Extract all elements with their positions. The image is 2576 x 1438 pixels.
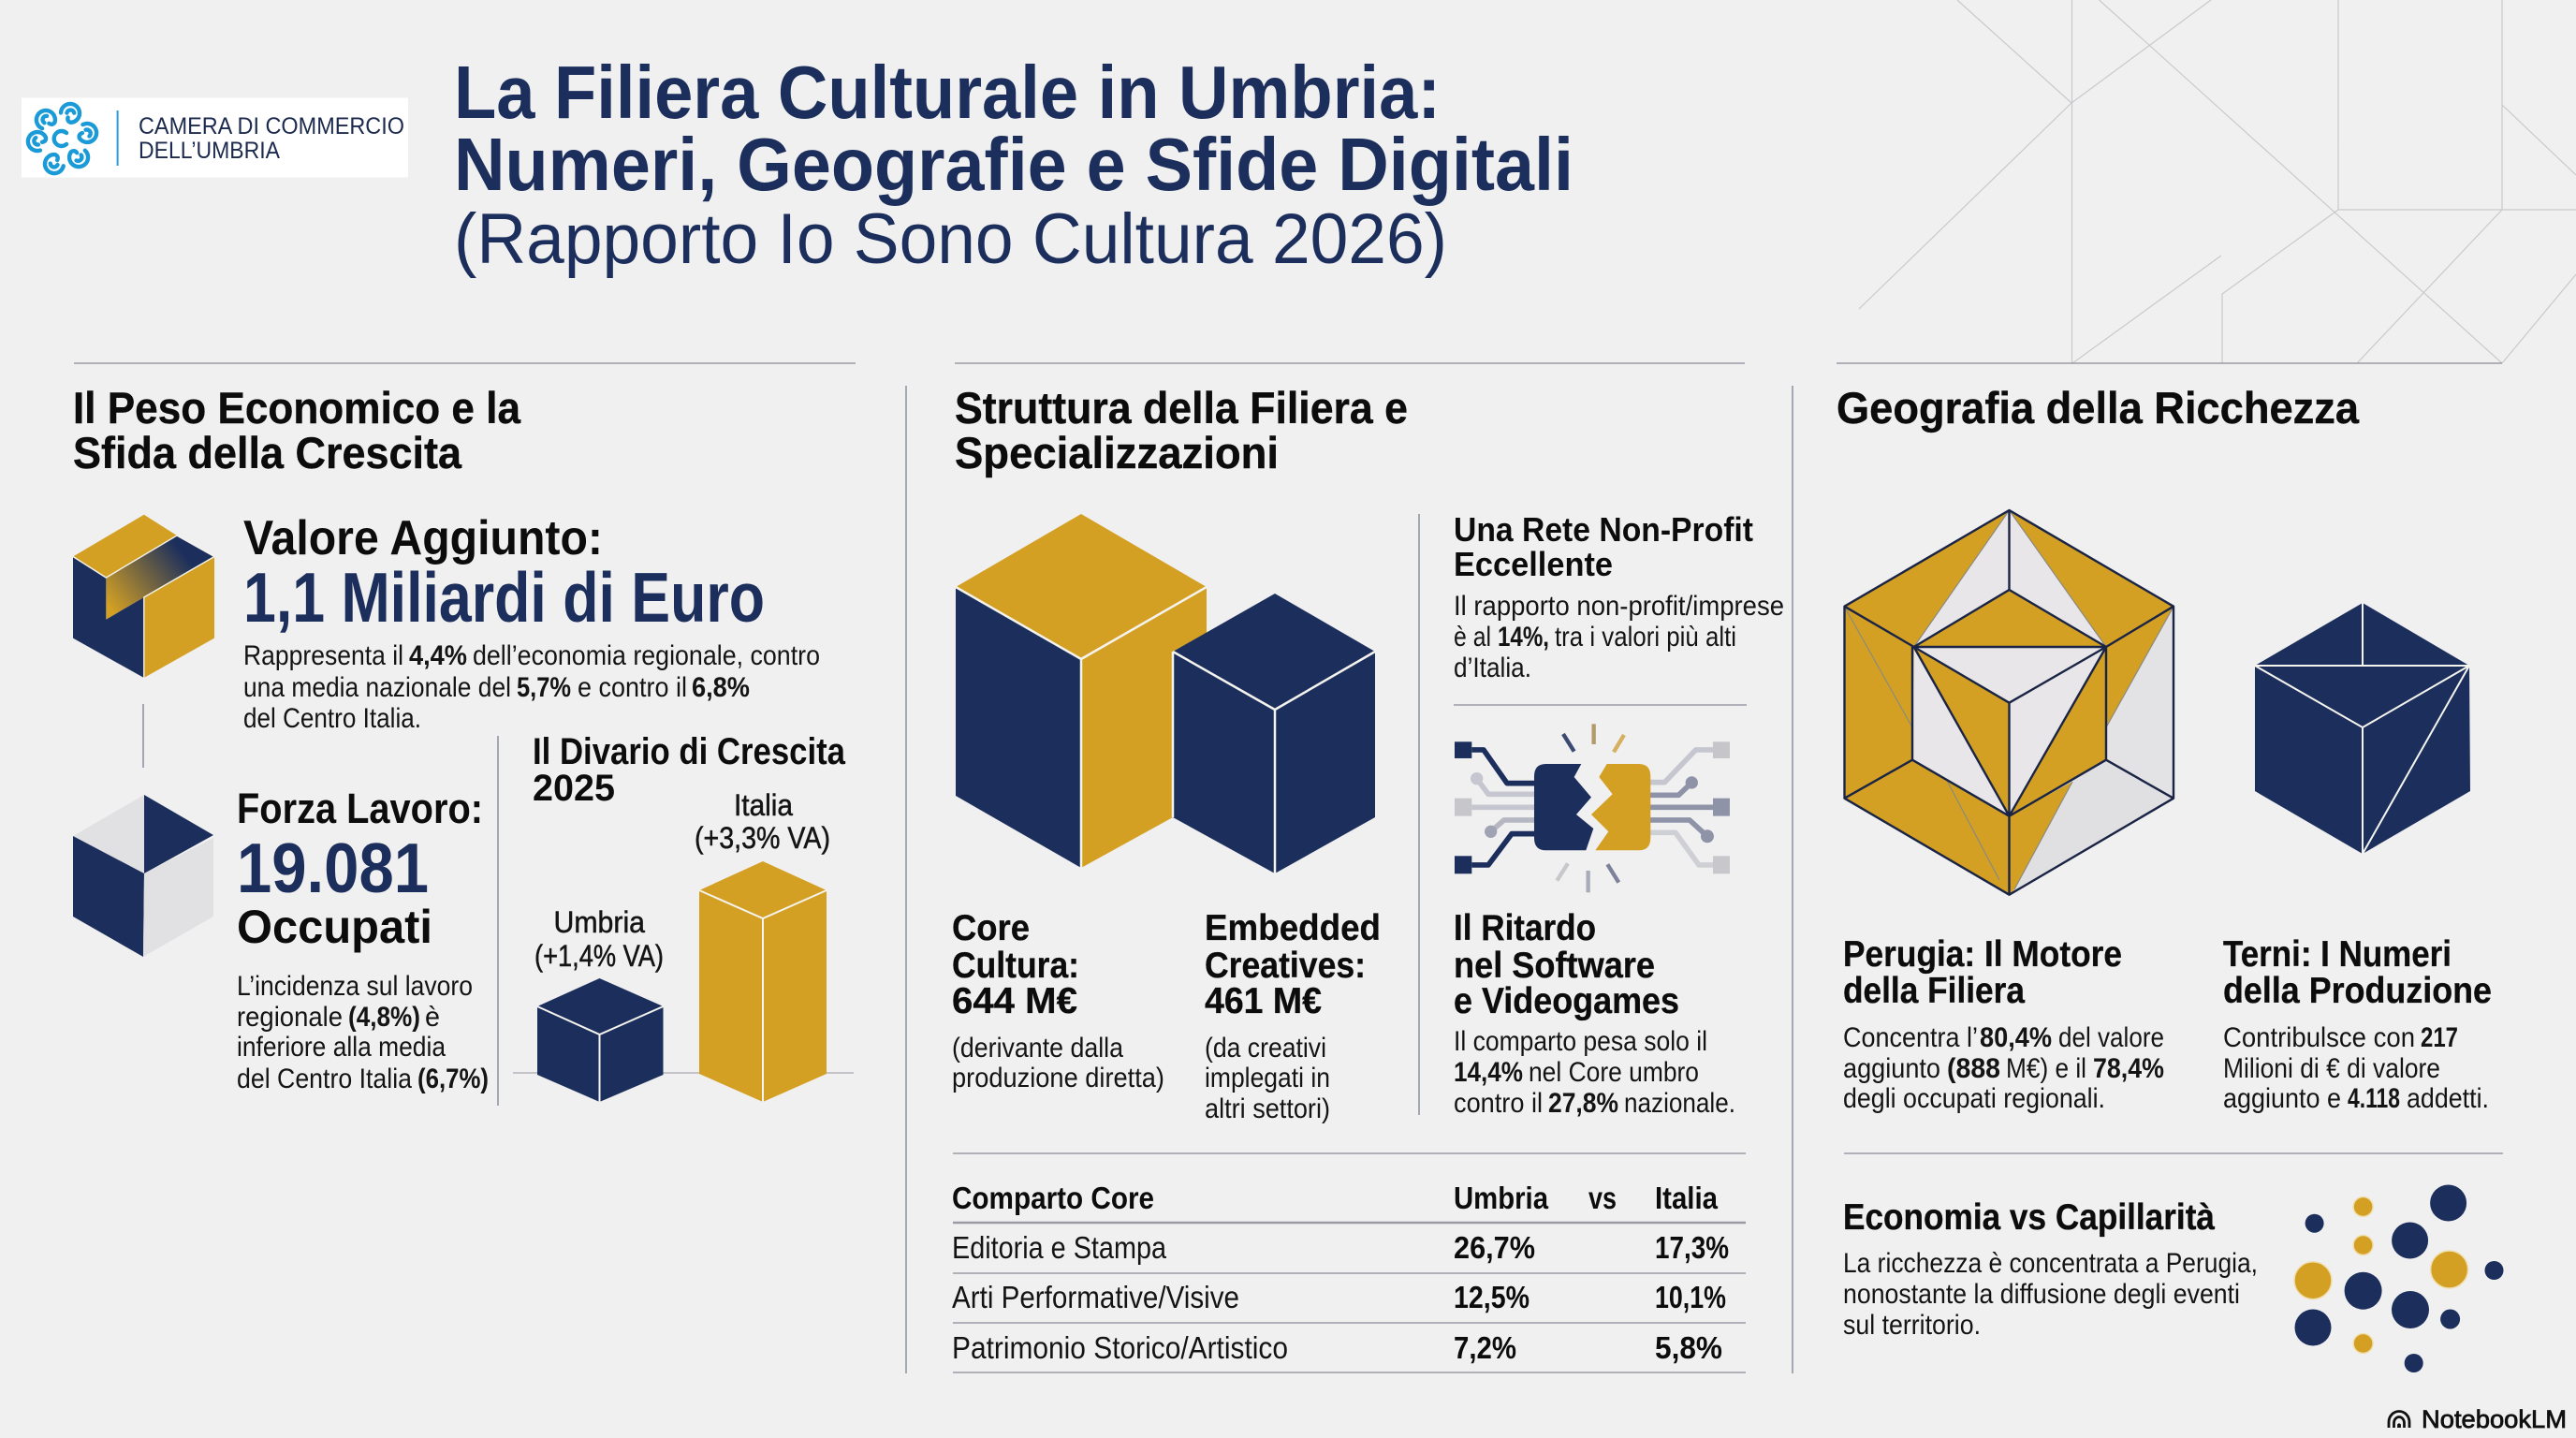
panel: Il Peso Economico bbox=[73, 383, 854, 1106]
chart title: Il Divario di Crescita bbox=[533, 731, 846, 772]
text: valore aggiunto: una media nazionale del bbox=[243, 672, 511, 703]
heading: struttura bbox=[955, 383, 1408, 477]
bar: Umbria: Umbria bbox=[554, 905, 645, 939]
text: forza lavoro: Forza Lavoro: bbox=[237, 785, 483, 832]
bar: Italia: Italia bbox=[734, 788, 793, 822]
text: economia vs capillarità: La ricchezza è concentrata a Perugia, bbox=[1843, 1248, 2258, 1279]
panel: Struttura della Filiera bbox=[952, 383, 1784, 1372]
table row: arti: 10,1% bbox=[1655, 1280, 1726, 1314]
text: Perugia: 78,4% bbox=[2093, 1053, 2164, 1084]
text: core cultura: (derivante dalla bbox=[952, 1033, 1123, 1064]
text: forza lavoro: regionale bbox=[237, 1002, 343, 1033]
table row: patrimonio: 5,8% bbox=[1655, 1330, 1722, 1365]
text: core cultura: 644 M€ bbox=[952, 981, 1077, 1021]
text: Perugia: del valore bbox=[2058, 1022, 2164, 1053]
text: Terni bbox=[2223, 934, 2492, 1114]
text: ritardo software e videogames: contro il bbox=[1454, 1088, 1543, 1119]
text: Terni: aggiunto e bbox=[2223, 1083, 2341, 1114]
table row: editoria bbox=[952, 1230, 1729, 1265]
table row: arti: Arti Performative/Visive bbox=[952, 1280, 1239, 1314]
text: ritardo software e videogames: nel Core umbro bbox=[1529, 1057, 1699, 1088]
bar: Italia bbox=[695, 788, 830, 1102]
text: Terni: 4.118 bbox=[2348, 1083, 2400, 1114]
table header: Comparto Core bbox=[952, 1181, 1154, 1215]
title: (Rapporto Io Sono Cultura 2026) bbox=[454, 199, 1447, 279]
text: embedded creatives bbox=[1205, 908, 1381, 1124]
table row: patrimonio: 7,2% bbox=[1454, 1330, 1516, 1365]
heading: peso economico bbox=[73, 383, 521, 477]
table row: arti bbox=[952, 1280, 1726, 1314]
text: forza lavoro: L’incidenza sul lavoro bbox=[237, 971, 473, 1002]
heading: struttura: Specializzazioni bbox=[955, 428, 1279, 477]
text: rete non-profit: Eccellente bbox=[1454, 545, 1613, 583]
text: rete non-profit: Una Rete Non-Profit bbox=[1454, 510, 1753, 549]
text: embedded creatives: 461 M€ bbox=[1205, 981, 1322, 1021]
chart title: 2025 bbox=[533, 768, 615, 809]
title: La Filiera Culturale in Umbria: bbox=[454, 51, 1441, 134]
text: valore aggiunto: 4,4% bbox=[409, 640, 467, 671]
heading: geografia: Geografia della Ricchezza bbox=[1837, 383, 2360, 433]
text: forza lavoro: (4,8%) bbox=[348, 1002, 420, 1033]
icon: Perugia gem bbox=[1844, 510, 2174, 895]
icon: valore aggiunto cube bbox=[73, 515, 214, 678]
text: ritardo software e videogames: 14,4% bbox=[1454, 1057, 1523, 1088]
text: valore aggiunto: 1,1 Miliardi di Euro bbox=[243, 558, 765, 637]
icon: broken digital chip bbox=[1455, 724, 1730, 892]
text: embedded creatives: altri settori) bbox=[1205, 1093, 1330, 1124]
text: forza lavoro: 19.081 bbox=[237, 829, 429, 907]
text: ritardo software e videogames: e Videogames bbox=[1454, 981, 1679, 1021]
text: Perugia: 80,4% bbox=[1980, 1022, 2052, 1053]
text: economia vs capillarità: nonostante la diffusione degli eventi bbox=[1843, 1279, 2240, 1310]
chart: il divario di crescita bbox=[513, 731, 854, 1102]
text: valore aggiunto: e contro il bbox=[578, 672, 687, 703]
icon: dot cluster bbox=[2294, 1185, 2503, 1372]
text: rete non-profit: 14%, bbox=[1498, 622, 1549, 653]
text: embedded creatives: Creatives: bbox=[1205, 946, 1366, 986]
title: Numeri, Geografie e Sfide Digitali bbox=[454, 123, 1573, 206]
text: forza lavoro: del Centro Italia bbox=[237, 1064, 412, 1094]
icon: core and embedded cubes bbox=[956, 514, 1375, 873]
chart title bbox=[533, 731, 846, 809]
heading: peso economico: Sfida della Crescita bbox=[73, 428, 462, 477]
text: core cultura: produzione diretta) bbox=[952, 1063, 1164, 1093]
panel: Geografia della Ricchezza bbox=[1837, 383, 2503, 1372]
text: rete non-profit: è al bbox=[1454, 622, 1491, 653]
text: forza lavoro bbox=[237, 785, 489, 1094]
watermark: NotebookLM: NotebookLM bbox=[2422, 1405, 2567, 1433]
text: rete non-profit bbox=[1454, 510, 1784, 683]
table header: Italia bbox=[1655, 1181, 1719, 1215]
table row: editoria: Editoria e Stampa bbox=[952, 1230, 1167, 1265]
text: valore aggiunto: dell’economia regionale, contro bbox=[473, 640, 820, 671]
bar: Umbria bbox=[534, 905, 664, 1102]
text: Perugia: (888 bbox=[1947, 1053, 2000, 1084]
logo: Camera di Commercio dell'Umbria bbox=[22, 97, 408, 178]
text: embedded creatives: Embedded bbox=[1205, 908, 1381, 948]
text: valore aggiunto: 6,8% bbox=[692, 672, 750, 703]
text: valore aggiunto bbox=[243, 511, 820, 734]
logo: Camera di Commercio dell'Umbria: CAMERA DI COMMERCIO bbox=[139, 113, 404, 139]
text: ritardo software e videogames: nel Software bbox=[1454, 946, 1655, 986]
table header: Umbria bbox=[1454, 1181, 1549, 1215]
text: Terni: addetti. bbox=[2407, 1083, 2489, 1114]
text: embedded creatives: implegati in bbox=[1205, 1063, 1330, 1093]
icon: forza lavoro cube bbox=[73, 795, 213, 957]
text: ritardo software e videogames: nazionale. bbox=[1624, 1088, 1735, 1119]
table row: editoria: 17,3% bbox=[1655, 1230, 1729, 1265]
logo: Camera di Commercio dell'Umbria: DELL’UMBRIA bbox=[139, 138, 280, 164]
text: valore aggiunto: del Centro Italia. bbox=[243, 703, 421, 734]
icon: Terni gem bbox=[2255, 603, 2470, 854]
text: ritardo software e videogames bbox=[1454, 908, 1735, 1119]
text: ritardo software e videogames: 27,8% bbox=[1548, 1088, 1618, 1119]
text: valore aggiunto: Valore Aggiunto: bbox=[243, 511, 603, 565]
text: core cultura bbox=[952, 908, 1164, 1093]
icon: logo swirls bbox=[25, 100, 98, 177]
text: Perugia: Concentra l’ bbox=[1843, 1022, 1978, 1053]
text: Perugia: Perugia: Il Motore bbox=[1843, 934, 2122, 975]
text: rete non-profit: tra i valori più alti bbox=[1555, 622, 1736, 653]
text: Terni: della Produzione bbox=[2223, 971, 2492, 1011]
text: Terni: 217 bbox=[2421, 1022, 2458, 1053]
heading: struttura: Struttura della Filiera e bbox=[955, 383, 1408, 433]
text: Perugia: M€) e il bbox=[2006, 1053, 2086, 1084]
text: valore aggiunto: 5,7% bbox=[517, 672, 571, 703]
table row: patrimonio: Patrimonio Storico/Artistico bbox=[952, 1330, 1288, 1365]
text: embedded creatives: (da creativi bbox=[1205, 1033, 1326, 1064]
title bbox=[454, 51, 1573, 279]
text: forza lavoro: è bbox=[425, 1002, 440, 1033]
text: valore aggiunto: Rappresenta il bbox=[243, 640, 403, 671]
bar: Italia: (+3,3% VA) bbox=[695, 821, 830, 855]
text: Perugia: della Filiera bbox=[1843, 971, 2025, 1011]
text: forza lavoro: Occupati bbox=[237, 901, 432, 953]
table row: arti: 12,5% bbox=[1454, 1280, 1530, 1314]
text: Terni: Contribulsce con bbox=[2223, 1022, 2415, 1053]
text: core cultura: Core bbox=[952, 908, 1030, 948]
bar: Umbria: (+1,4% VA) bbox=[534, 939, 664, 973]
table header: vs bbox=[1588, 1181, 1617, 1215]
text: forza lavoro: (6,7%) bbox=[417, 1064, 489, 1094]
text: Terni: Milioni di € di valore bbox=[2223, 1053, 2440, 1084]
heading: peso economico: Il Peso Economico e la bbox=[73, 383, 521, 433]
table: comparto core bbox=[952, 1181, 1746, 1372]
text: ritardo software e videogames: Il comparto pesa solo il bbox=[1454, 1026, 1707, 1057]
text: ritardo software e videogames: Il Ritardo bbox=[1454, 908, 1596, 948]
text: Perugia: degli occupati regionali. bbox=[1843, 1083, 2105, 1114]
table row: patrimonio bbox=[952, 1330, 1722, 1365]
text: Perugia: aggiunto bbox=[1843, 1053, 1940, 1084]
text: rete non-profit: Il rapporto non-profit/imprese bbox=[1454, 591, 1784, 622]
text: core cultura: Cultura: bbox=[952, 946, 1079, 986]
text: rete non-profit: d’Italia. bbox=[1454, 653, 1531, 683]
text: forza lavoro: inferiore alla media bbox=[237, 1032, 446, 1063]
table row: editoria: 26,7% bbox=[1454, 1230, 1535, 1265]
table header bbox=[952, 1181, 1719, 1215]
text: Terni: Terni: I Numeri bbox=[2223, 934, 2452, 975]
text: economia vs capillarità bbox=[1843, 1197, 2258, 1341]
text: Perugia bbox=[1843, 934, 2164, 1114]
text: economia vs capillarità: sul territorio. bbox=[1843, 1310, 1981, 1341]
text: economia vs capillarità: Economia vs Capillarità bbox=[1843, 1197, 2215, 1238]
